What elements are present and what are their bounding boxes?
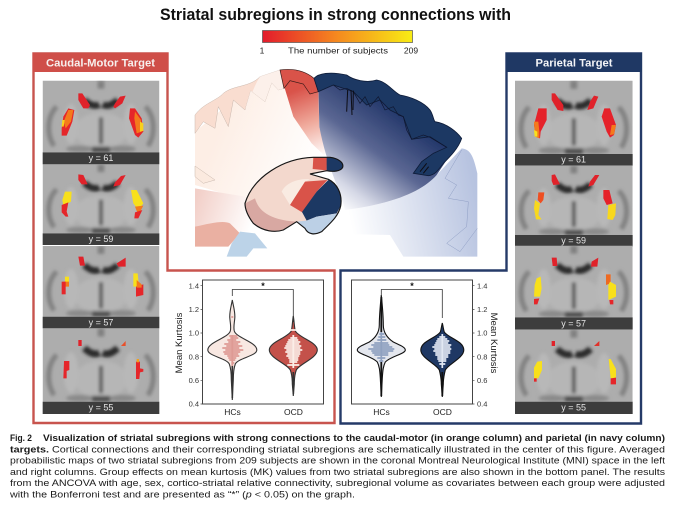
- color bar legend: The number of subjects: [288, 46, 388, 56]
- y axis ticks and labels: 0.8: [189, 352, 199, 361]
- y axis ticks and labels: [189, 282, 202, 409]
- axis title: Mean Kurtosis: [174, 312, 185, 373]
- significance bracket navy: [381, 281, 442, 318]
- right y axis ticks and labels: 0.6: [477, 376, 487, 385]
- striatum outline: [245, 157, 343, 234]
- violin HCs navy: [357, 295, 405, 397]
- right y axis ticks and labels: 0.8: [477, 352, 487, 361]
- small left frontal patch: [195, 166, 215, 183]
- color bar legend: [260, 30, 418, 56]
- putamen red section: [290, 180, 327, 213]
- inner light striatum: [282, 179, 310, 205]
- slice y = 61 caudal: y = 61: [89, 153, 113, 163]
- caudate red section: [313, 157, 327, 170]
- slice y = 55 caudal: y = 55: [89, 403, 113, 413]
- sulcus marks: [347, 90, 429, 173]
- brain slices: caudal-motor upper: [43, 81, 159, 245]
- x labels: HCs: [224, 407, 241, 417]
- ventral blue section: [297, 213, 337, 234]
- right y axis ticks and labels: [472, 282, 487, 409]
- slice y = 55 parietal: [515, 330, 633, 414]
- right y axis ticks and labels: 1.4: [477, 282, 487, 290]
- caption: targets.: [10, 444, 49, 456]
- y axis ticks and labels: 0.4: [189, 400, 199, 409]
- caudate navy section: [327, 157, 343, 171]
- pale blue parietal-occipital region: [240, 148, 477, 257]
- color bar legend: 1: [260, 46, 265, 56]
- caption: Cortical connections and their corresponding striatal subregions are schematically illustrated in the center of this figure. Averaged: [52, 444, 665, 456]
- red gradient projection: [281, 75, 327, 158]
- pale cortical fan: [195, 70, 327, 200]
- panel: caudal-motor target frame: [32, 53, 334, 423]
- violin chart: parietal: [352, 280, 499, 417]
- significance bracket navy: *: [410, 281, 414, 291]
- x labels navy: [373, 407, 452, 417]
- central brain schematic: [195, 69, 477, 257]
- x labels: [224, 407, 303, 417]
- slice y = 57 caudal: [43, 246, 159, 328]
- caption: with the Bonferroni test and are presented as “*” ( p < 0.05) on the graph.: [9, 490, 355, 500]
- y axis ticks and labels: 1.2: [189, 305, 199, 314]
- brain slices: parietal upper: [515, 81, 633, 247]
- red cortical strip: [280, 69, 318, 94]
- slice y = 59 parietal: [515, 166, 633, 247]
- slice y = 55 caudal: [43, 328, 159, 414]
- slice y = 61 caudal: [43, 81, 159, 164]
- pink lower-left region: [195, 188, 253, 232]
- title: Striatal subregions in strong connections with: [160, 5, 511, 24]
- slice y = 55 parietal: y = 55: [561, 403, 586, 413]
- right y axis ticks and labels: 1.0: [477, 329, 487, 338]
- slice y = 61 parietal: y = 61: [561, 154, 586, 164]
- violin HCs: [208, 300, 257, 400]
- lower caudate shade: [245, 198, 297, 231]
- brain slices: caudal-motor lower: [43, 246, 159, 414]
- caption: probabilistic maps of two striatal subregions from 209 subjects are shown in the coronal Montreal Neurological Institute (MNI) space in the left: [10, 456, 665, 466]
- slice y = 59 caudal: y = 59: [89, 234, 113, 244]
- right axis title: Mean Kurtosis: [488, 313, 499, 374]
- violin chart: caudal-motor: [174, 280, 324, 417]
- caption: and right columns. Group effects on mean kurtosis (MK) values from two striatal subregions are also shown in the bottom panel. The results: [10, 467, 665, 478]
- caption: from the ANCOVA with age, sex, cortico-striatal relative connectivity, subregional volume as covariates between each group were adjusted: [10, 478, 665, 489]
- slice y = 61 parietal: [515, 81, 633, 166]
- pale frontal white patch: [245, 70, 284, 110]
- slice y = 59 parietal: y = 59: [561, 236, 586, 246]
- navy cortical strip: [314, 73, 462, 176]
- violin OCD navy: [421, 323, 464, 397]
- right y axis ticks and labels: 1.2: [477, 305, 487, 314]
- right y axis ticks and labels: 0.4: [477, 400, 487, 409]
- panel: parietal target frame: Parietal Target: [536, 58, 613, 70]
- lower-left pink gyrus: [195, 222, 240, 247]
- significance bracket: *: [261, 281, 265, 291]
- color bar legend: 209: [404, 46, 418, 56]
- caption: Visualization of striatal subregions with strong connections to the caudal-motor (in orange column) and parietal (in navy column): [43, 433, 665, 444]
- y axis ticks and labels: 0.6: [189, 376, 199, 385]
- x labels navy: OCD: [433, 407, 452, 417]
- navy gradient projection: [318, 83, 460, 210]
- inner jagged sulcus line: [333, 85, 447, 147]
- panel: caudal-motor target frame: Caudal-Motor Target: [46, 58, 155, 70]
- panel: parietal target frame: [340, 53, 642, 424]
- putamen navy section: [302, 180, 341, 221]
- slice y = 57 parietal: [515, 246, 633, 330]
- caption: Fig. 2: [10, 433, 32, 444]
- pale pink gyral strip: [195, 70, 284, 133]
- slice y = 57 caudal: y = 57: [89, 317, 113, 327]
- slice y = 59 caudal: [43, 164, 159, 245]
- significance bracket: [232, 281, 293, 322]
- striatum: [245, 157, 343, 234]
- y axis ticks and labels: 1.0: [189, 329, 199, 338]
- brain slices: parietal lower: [515, 246, 633, 414]
- caption: [9, 433, 665, 500]
- x labels navy: HCs: [373, 407, 390, 417]
- y axis ticks and labels: 1.4: [189, 282, 199, 290]
- occipital sulcus line: [445, 150, 477, 252]
- slice y = 57 parietal: y = 57: [561, 319, 586, 329]
- lower blue gyrus: [227, 232, 267, 257]
- x labels: OCD: [284, 407, 303, 417]
- violin OCD: [269, 316, 317, 396]
